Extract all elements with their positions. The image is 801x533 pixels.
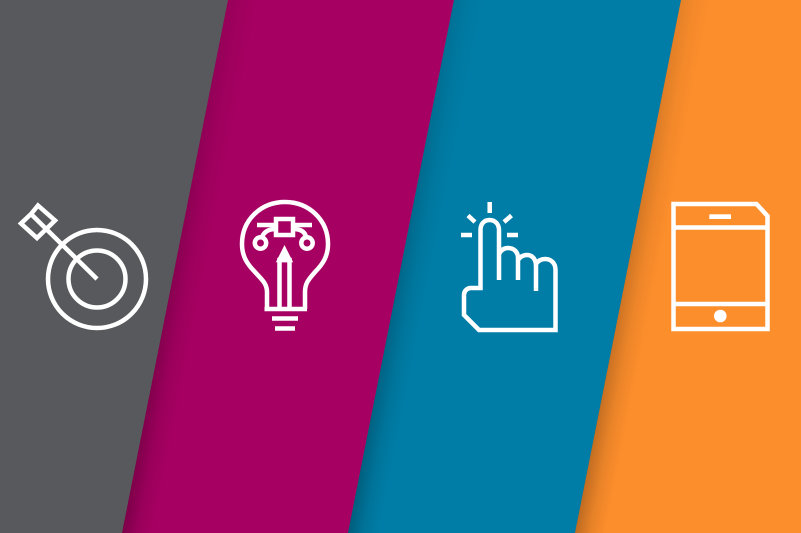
- icon: tapping hand: [461, 202, 556, 330]
- icon: target with arrow: [21, 206, 146, 328]
- panel: grey band: [0, 0, 240, 533]
- panel: blue band: [348, 0, 681, 533]
- icon: tablet: [674, 204, 768, 329]
- icon: light bulb with pencil and vector path: [242, 202, 328, 328]
- panel: orange band: [575, 0, 801, 533]
- panel: magenta band: [122, 0, 454, 533]
